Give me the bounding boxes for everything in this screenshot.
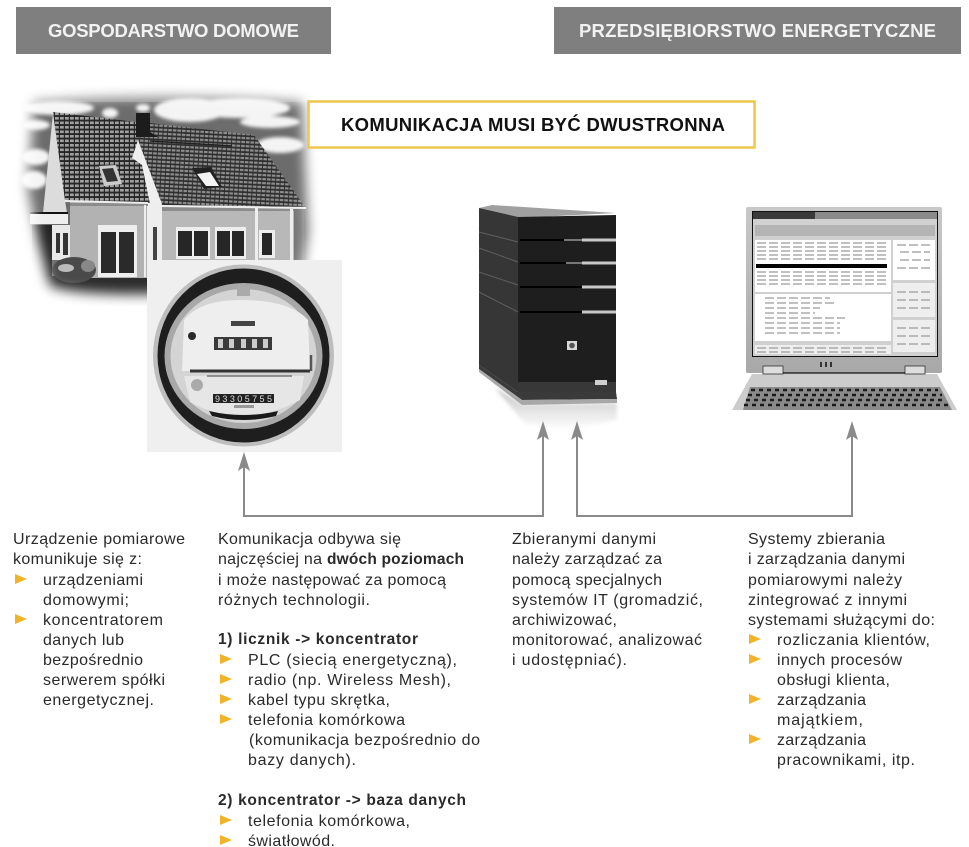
photo: electricity meter [147, 260, 342, 452]
text block: zbieranymi danymi: Zbieranymi danymi [512, 531, 656, 548]
text block: zbieranymi danymi: i udostępniać). [512, 652, 627, 669]
header: przedsiebiorstwo energetyczne: PRZEDSIĘBIORSTWO ENERGETYCZNE [579, 20, 936, 41]
text block: komunikacja odbywa sie: telefonia komórkowa [248, 712, 405, 729]
text block: zbieranymi danymi: pomocą specjalnych [512, 572, 662, 589]
logo [567, 341, 577, 350]
text block: zbieranymi danymi: archiwizować, [512, 612, 617, 629]
callout: komunikacja musi byc dwustronna [308, 102, 754, 148]
text block: systemy zbierania: rozliczania klientów, [777, 632, 930, 649]
usage dials [231, 321, 255, 326]
text block: systemy zbierania: zarządzania [777, 732, 866, 749]
windows [98, 225, 137, 277]
text block: systemy zbierania: zarządzania [777, 692, 866, 709]
callout: komunikacja musi byc dwustronna: KOMUNIKACJA MUSI BYĆ DWUSTRONNA [341, 114, 725, 135]
text block: komunikacja odbywa sie: i może następować za pomocą [218, 572, 446, 589]
text block: urzadzenie pomiarowe: domowymi; [43, 592, 129, 609]
text block: zbieranymi danymi: należy zarządzać za [512, 551, 662, 568]
text block: urzadzenie pomiarowe: Urządzenie pomiarowe [13, 531, 185, 548]
text block: systemy zbierania: pomiarowymi należy [748, 572, 902, 589]
balcony [30, 213, 68, 224]
text block: urzadzenie pomiarowe [13, 531, 185, 709]
text block: zbieranymi danymi: systemów IT (gromadzić, [512, 592, 703, 609]
text block: komunikacja odbywa sie: najczęściej na [218, 551, 322, 568]
text block: komunikacja odbywa sie: 1) licznik -> koncentrator [218, 631, 418, 648]
text block: komunikacja odbywa sie: bazy danych). [248, 752, 356, 769]
drainpipes [144, 205, 146, 277]
text block: systemy zbierania: obsługi klienta, [777, 672, 890, 689]
header: gospodarstwo domowe [16, 7, 331, 54]
text block: komunikacja odbywa sie: różnych technologii. [218, 592, 370, 609]
roofs [53, 112, 152, 203]
text block: systemy zbierania: i zarządzania danymi [748, 551, 905, 568]
text block: komunikacja odbywa sie: kabel typu skrętka, [248, 692, 390, 709]
text block: komunikacja odbywa sie: radio (np. Wireless Mesh), [248, 672, 451, 689]
arrow: server to laptop [571, 421, 858, 516]
header: gospodarstwo domowe: GOSPODARSTWO DOMOWE [48, 20, 299, 41]
photo: laptop with software screen [732, 207, 957, 410]
text block: systemy zbierania: pracownikami, itp. [777, 752, 915, 769]
text block: komunikacja odbywa sie: Komunikacja odbywa się [218, 531, 401, 548]
arrow: meter to server [238, 421, 549, 516]
text block: systemy zbierania: zintegrować z innymi [748, 592, 907, 609]
walls [70, 202, 148, 278]
text block: urzadzenie pomiarowe: energetycznej. [43, 692, 154, 709]
text block: zbieranymi danymi: monitorować, analizować [512, 632, 702, 649]
text block: zbieranymi danymi [512, 531, 703, 669]
text block: komunikacja odbywa sie: PLC (siecią energetyczną), [248, 652, 457, 669]
header: przedsiebiorstwo energetyczne [554, 7, 961, 54]
text block: komunikacja odbywa sie: (komunikacja bezpośrednio do [249, 732, 480, 749]
text block: urzadzenie pomiarowe: bezpośrednio [43, 652, 143, 669]
text block: systemy zbierania: innych procesów [777, 652, 902, 669]
text block: systemy zbierania: Systemy zbierania [748, 531, 885, 548]
text block: urzadzenie pomiarowe: komunikuje się z: [13, 551, 142, 568]
text block: systemy zbierania: majątkiem, [777, 712, 863, 729]
text block: komunikacja odbywa sie: 2) koncentrator -> baza danych [218, 792, 466, 809]
bushes [52, 257, 96, 283]
text block: systemy zbierania [748, 531, 935, 769]
text block: urzadzenie pomiarowe: urządzeniami [43, 572, 143, 589]
photo: electricity meter: 93305755 [215, 394, 272, 404]
text block: komunikacja odbywa sie: telefonia komórkowa, [248, 813, 410, 830]
text block: urzadzenie pomiarowe: danych lub [43, 632, 124, 649]
roof windows [99, 165, 122, 186]
text block: systemy zbierania: systemami służącymi do: [748, 612, 935, 629]
text block: urzadzenie pomiarowe: serwerem spółki [43, 672, 165, 689]
photo: server [479, 205, 617, 430]
text block: komunikacja odbywa sie [218, 531, 480, 847]
text block: urzadzenie pomiarowe: koncentratorem [43, 612, 163, 629]
white gable of house [43, 113, 67, 213]
photo: house [10, 80, 320, 306]
text block: komunikacja odbywa sie: dwóch poziomach [327, 551, 464, 568]
